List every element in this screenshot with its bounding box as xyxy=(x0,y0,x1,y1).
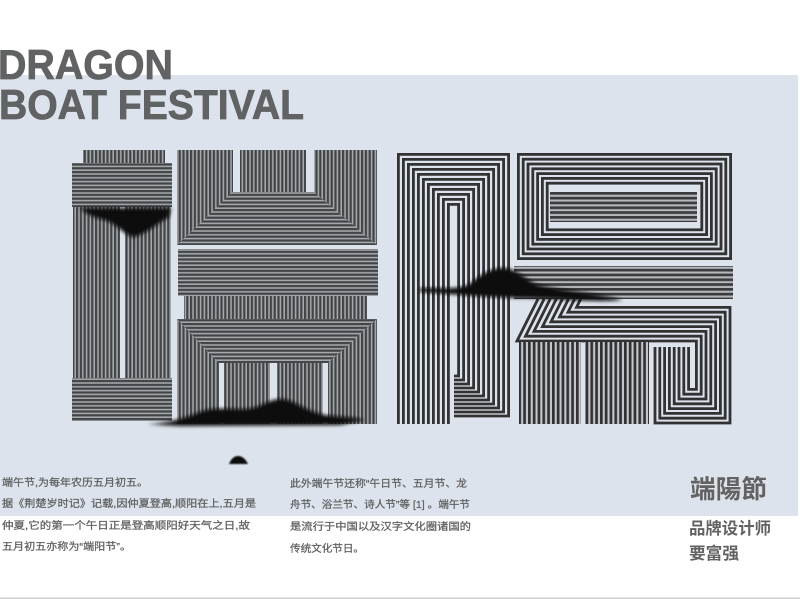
heading: festival name: 端陽節 xyxy=(690,475,767,504)
artwork: character duan, right component xyxy=(177,150,378,424)
artwork: character duan, left radical xyxy=(72,150,172,421)
artwork: character yang, top frame xyxy=(518,154,731,259)
text block: left paragraph xyxy=(2,476,256,553)
designer credit xyxy=(689,519,771,563)
artwork: character yang, left radical xyxy=(398,154,509,424)
text block: middle paragraph: 是流行于中国以及汉字文化圈诸国的 xyxy=(290,520,471,533)
designer credit: 要富强 xyxy=(689,544,740,563)
background panel xyxy=(0,75,798,516)
text block: left paragraph: 端午节,为每年农历五月初五。 xyxy=(2,476,148,489)
text block: left paragraph: 据《荆楚岁时记》记载,因仲夏登高,顺阳在上,五月是 xyxy=(2,497,256,510)
artwork: character yang, middle band xyxy=(514,266,733,299)
ink mountain: centre of second character xyxy=(420,268,623,301)
artwork: character yang, lower columns xyxy=(519,342,649,424)
title: BOAT FESTIVAL xyxy=(0,81,304,128)
artwork: character yang, spiral xyxy=(517,299,730,423)
text block: middle paragraph: 此外端午节还称“午日节、五月节、龙 xyxy=(290,477,467,490)
text block: middle paragraph: 传统文化节日。 xyxy=(290,542,364,555)
ink mountain: under left radical xyxy=(80,208,171,237)
designer credit: 品牌设计师 xyxy=(689,519,771,538)
title: DRAGON xyxy=(0,41,173,88)
text block: middle paragraph: 舟节、浴兰节、诗人节”等 [1] 。端午节 xyxy=(290,498,470,511)
ink mountain: bottom of first character xyxy=(147,399,365,426)
text block: left paragraph: 仲夏,它的第一个午日正是登高顺阳好天气之日,故 xyxy=(2,519,251,532)
text block: middle paragraph xyxy=(290,477,471,555)
text block: left paragraph: 五月初五亦称为“端阳节”。 xyxy=(2,540,131,553)
ink mountain: small peak xyxy=(229,456,248,464)
title xyxy=(0,41,304,128)
